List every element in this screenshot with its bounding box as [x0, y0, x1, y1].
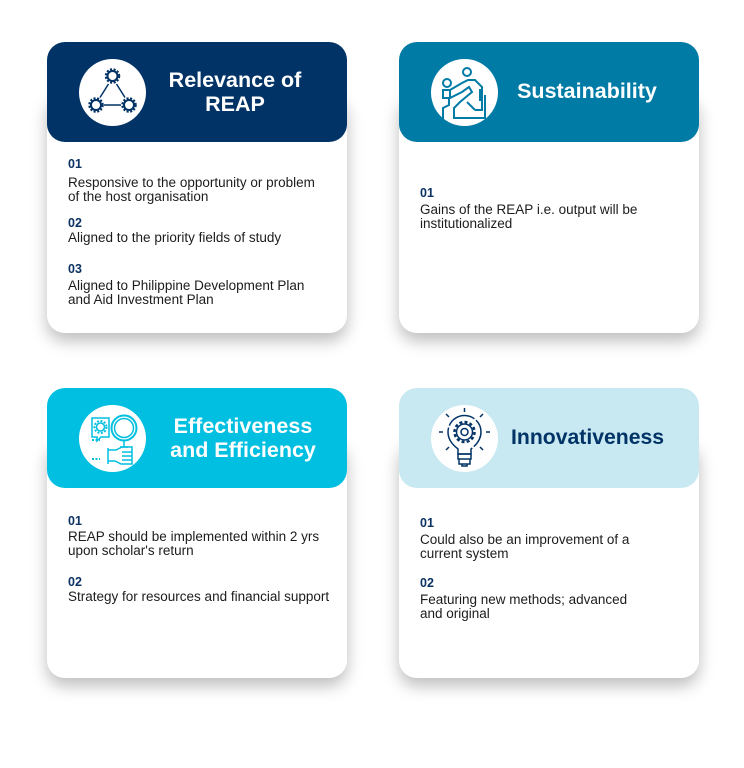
panel: Sustainability	[390, 42, 708, 350]
item 01 text: institutionalized	[420, 216, 512, 231]
item 01 number: 01	[68, 157, 82, 171]
item 02 text: Aligned to the priority fields of study	[68, 230, 281, 245]
heading	[169, 68, 302, 116]
item 02 number: 02	[420, 576, 434, 590]
item 01 text	[68, 175, 315, 204]
item 02 text: Featuring new methods; advanced	[420, 592, 627, 607]
item 01 text: of the host organisation	[68, 189, 208, 204]
item 02 number: 02	[68, 216, 82, 230]
item 01 text: Gains of the REAP i.e. output will be	[420, 202, 637, 217]
panel: Effectiveness and Efficiency	[38, 388, 356, 694]
panel: Innovativeness	[390, 388, 708, 694]
icon: light bulb with gear	[431, 405, 498, 472]
item 01 text	[420, 202, 637, 231]
heading: Sustainability	[517, 79, 657, 103]
item 01 number: 01	[420, 186, 434, 200]
item 03 text	[68, 278, 304, 307]
heading: Relevance of	[169, 68, 301, 92]
heading	[170, 414, 316, 462]
panel: Relevance of REAP	[38, 42, 356, 350]
heading: REAP	[205, 92, 265, 116]
item 02 text	[420, 592, 627, 621]
header: Effectiveness and Efficiency	[47, 388, 347, 488]
item 01 text: REAP should be implemented within 2 yrs	[68, 529, 319, 544]
icon: person helping another climb	[431, 59, 498, 126]
heading: and Efficiency	[170, 438, 316, 462]
header: Sustainability	[399, 42, 699, 142]
header: Innovativeness	[399, 388, 699, 488]
item 02 text: and original	[420, 606, 490, 621]
header: Relevance of REAP	[47, 42, 347, 142]
item 01 text	[420, 532, 630, 561]
item 01 text: Could also be an improvement of a	[420, 532, 629, 547]
item 01 text: upon scholar's return	[68, 543, 194, 558]
item 03 text: Aligned to Philippine Development Plan	[68, 278, 304, 293]
item 01 text: Responsive to the opportunity or problem	[68, 175, 315, 190]
icon: connected gears	[79, 59, 146, 126]
item 03 number: 03	[68, 262, 82, 276]
item 01 text	[68, 529, 319, 558]
heading: Effectiveness	[174, 414, 312, 438]
item 01 number: 01	[420, 516, 434, 530]
item 02 text: Strategy for resources and financial support	[68, 589, 329, 604]
item 03 text: and Aid Investment Plan	[68, 292, 214, 307]
item 02 number: 02	[68, 575, 82, 589]
icon: magnifier in hand with gear	[79, 405, 146, 472]
item 01 text: current system	[420, 546, 509, 561]
heading: Innovativeness	[511, 426, 664, 449]
item 01 number: 01	[68, 514, 82, 528]
